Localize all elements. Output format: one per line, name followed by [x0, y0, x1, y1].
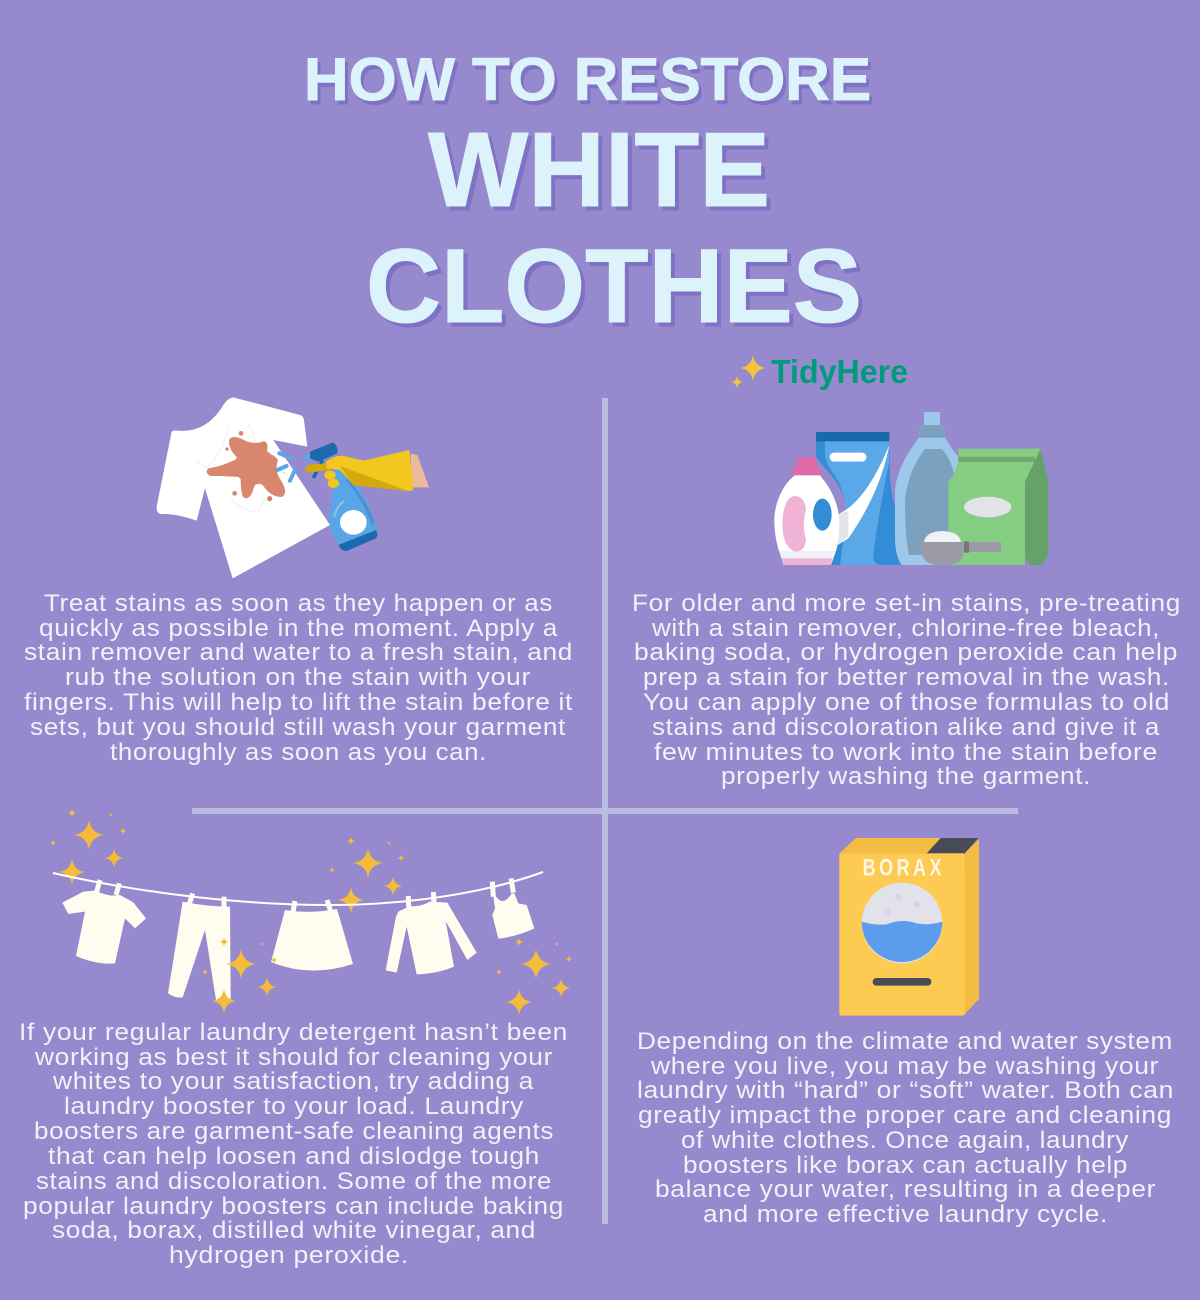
- text block: hard or soft water: laundry with “hard” or “soft” water. Both can: [637, 1077, 1174, 1104]
- title: CLOTHES: [370, 232, 866, 349]
- text block: laundry boosters: laundry booster to your load. Laundry: [64, 1093, 524, 1120]
- text block: older stains: stains and discoloration alike and give it a: [652, 714, 1160, 741]
- icon: borax box: [839, 838, 979, 1016]
- icon: clothesline with sparkles: [50, 809, 572, 1015]
- title: WHITE: [432, 115, 774, 233]
- text block: older stains: with a stain remover, chlorine-free bleach,: [651, 615, 1160, 642]
- text block: hard or soft water: boosters like borax can actually help: [683, 1152, 1128, 1179]
- text block: hard or soft water: and more effective laundry cycle.: [703, 1201, 1108, 1228]
- text block: laundry boosters: whites to your satisfaction, try adding a: [52, 1068, 534, 1095]
- title: HOW TO RESTORE: [304, 46, 871, 113]
- text block: treat stains: sets, but you should still wash your garment: [30, 714, 566, 741]
- title: CLOTHES: [366, 228, 862, 345]
- text block: treat stains: rub the solution on the stain with your: [65, 664, 531, 691]
- text block: older stains: For older and more set-in stains, pre-treating: [632, 590, 1181, 617]
- text block: treat stains: fingers. This will help to lift the stain before it: [24, 689, 573, 716]
- text block: laundry boosters: soda, borax, distilled white vinegar, and: [52, 1217, 536, 1244]
- text block: older stains: prep a stain for better removal in the wash.: [643, 664, 1170, 691]
- text block: hard or soft water: Depending on the climate and water system: [637, 1028, 1173, 1055]
- text block: laundry boosters: working as best it should for cleaning your: [34, 1044, 553, 1071]
- text block: laundry boosters: hydrogen peroxide.: [169, 1242, 409, 1269]
- title: [304, 46, 874, 349]
- text block: hard or soft water: [637, 1028, 1174, 1228]
- text block: older stains: few minutes to work into the stain before: [654, 739, 1158, 766]
- text block: laundry boosters: [19, 1019, 568, 1269]
- text block: treat stains: stain remover and water to a fresh stain, and: [24, 639, 573, 666]
- icon: stained shirt and spray bottle: [157, 397, 429, 578]
- text block: older stains: [632, 590, 1181, 790]
- text block: treat stains: thoroughly as soon as you can.: [110, 739, 487, 766]
- text block: hard or soft water: of white clothes. Once again, laundry: [681, 1127, 1129, 1154]
- text block: laundry boosters: popular laundry boosters can include baking: [23, 1193, 564, 1220]
- text block: treat stains: Treat stains as soon as they happen or as: [44, 590, 553, 617]
- text block: older stains: properly washing the garment.: [721, 763, 1091, 790]
- text block: treat stains: [24, 590, 573, 766]
- text block: hard or soft water: greatly impact the proper care and cleaning: [638, 1102, 1172, 1129]
- text block: older stains: baking soda, or hydrogen peroxide can help: [634, 639, 1178, 666]
- text block: hard or soft water: balance your water, resulting in a deeper: [655, 1176, 1156, 1203]
- text block: laundry boosters: If your regular laundry detergent hasn’t been: [19, 1019, 568, 1046]
- logo: TidyHere: TidyHere: [771, 353, 908, 390]
- text block: treat stains: quickly as possible in the moment. Apply a: [39, 615, 558, 642]
- text block: laundry boosters: boosters are garment-safe cleaning agents: [34, 1118, 554, 1145]
- icon: borax box: BORAX: [863, 854, 945, 881]
- text block: hard or soft water: where you live, you may be washing your: [650, 1053, 1159, 1080]
- text block: older stains: You can apply one of those formulas to old: [643, 689, 1170, 716]
- icon: laundry product bottles: [774, 412, 1048, 565]
- text block: laundry boosters: stains and discoloration. Some of the more: [36, 1168, 552, 1195]
- title: HOW TO RESTORE: [307, 50, 874, 117]
- title: WHITE: [428, 111, 770, 229]
- text block: laundry boosters: that can help loosen and dislodge tough: [48, 1143, 540, 1170]
